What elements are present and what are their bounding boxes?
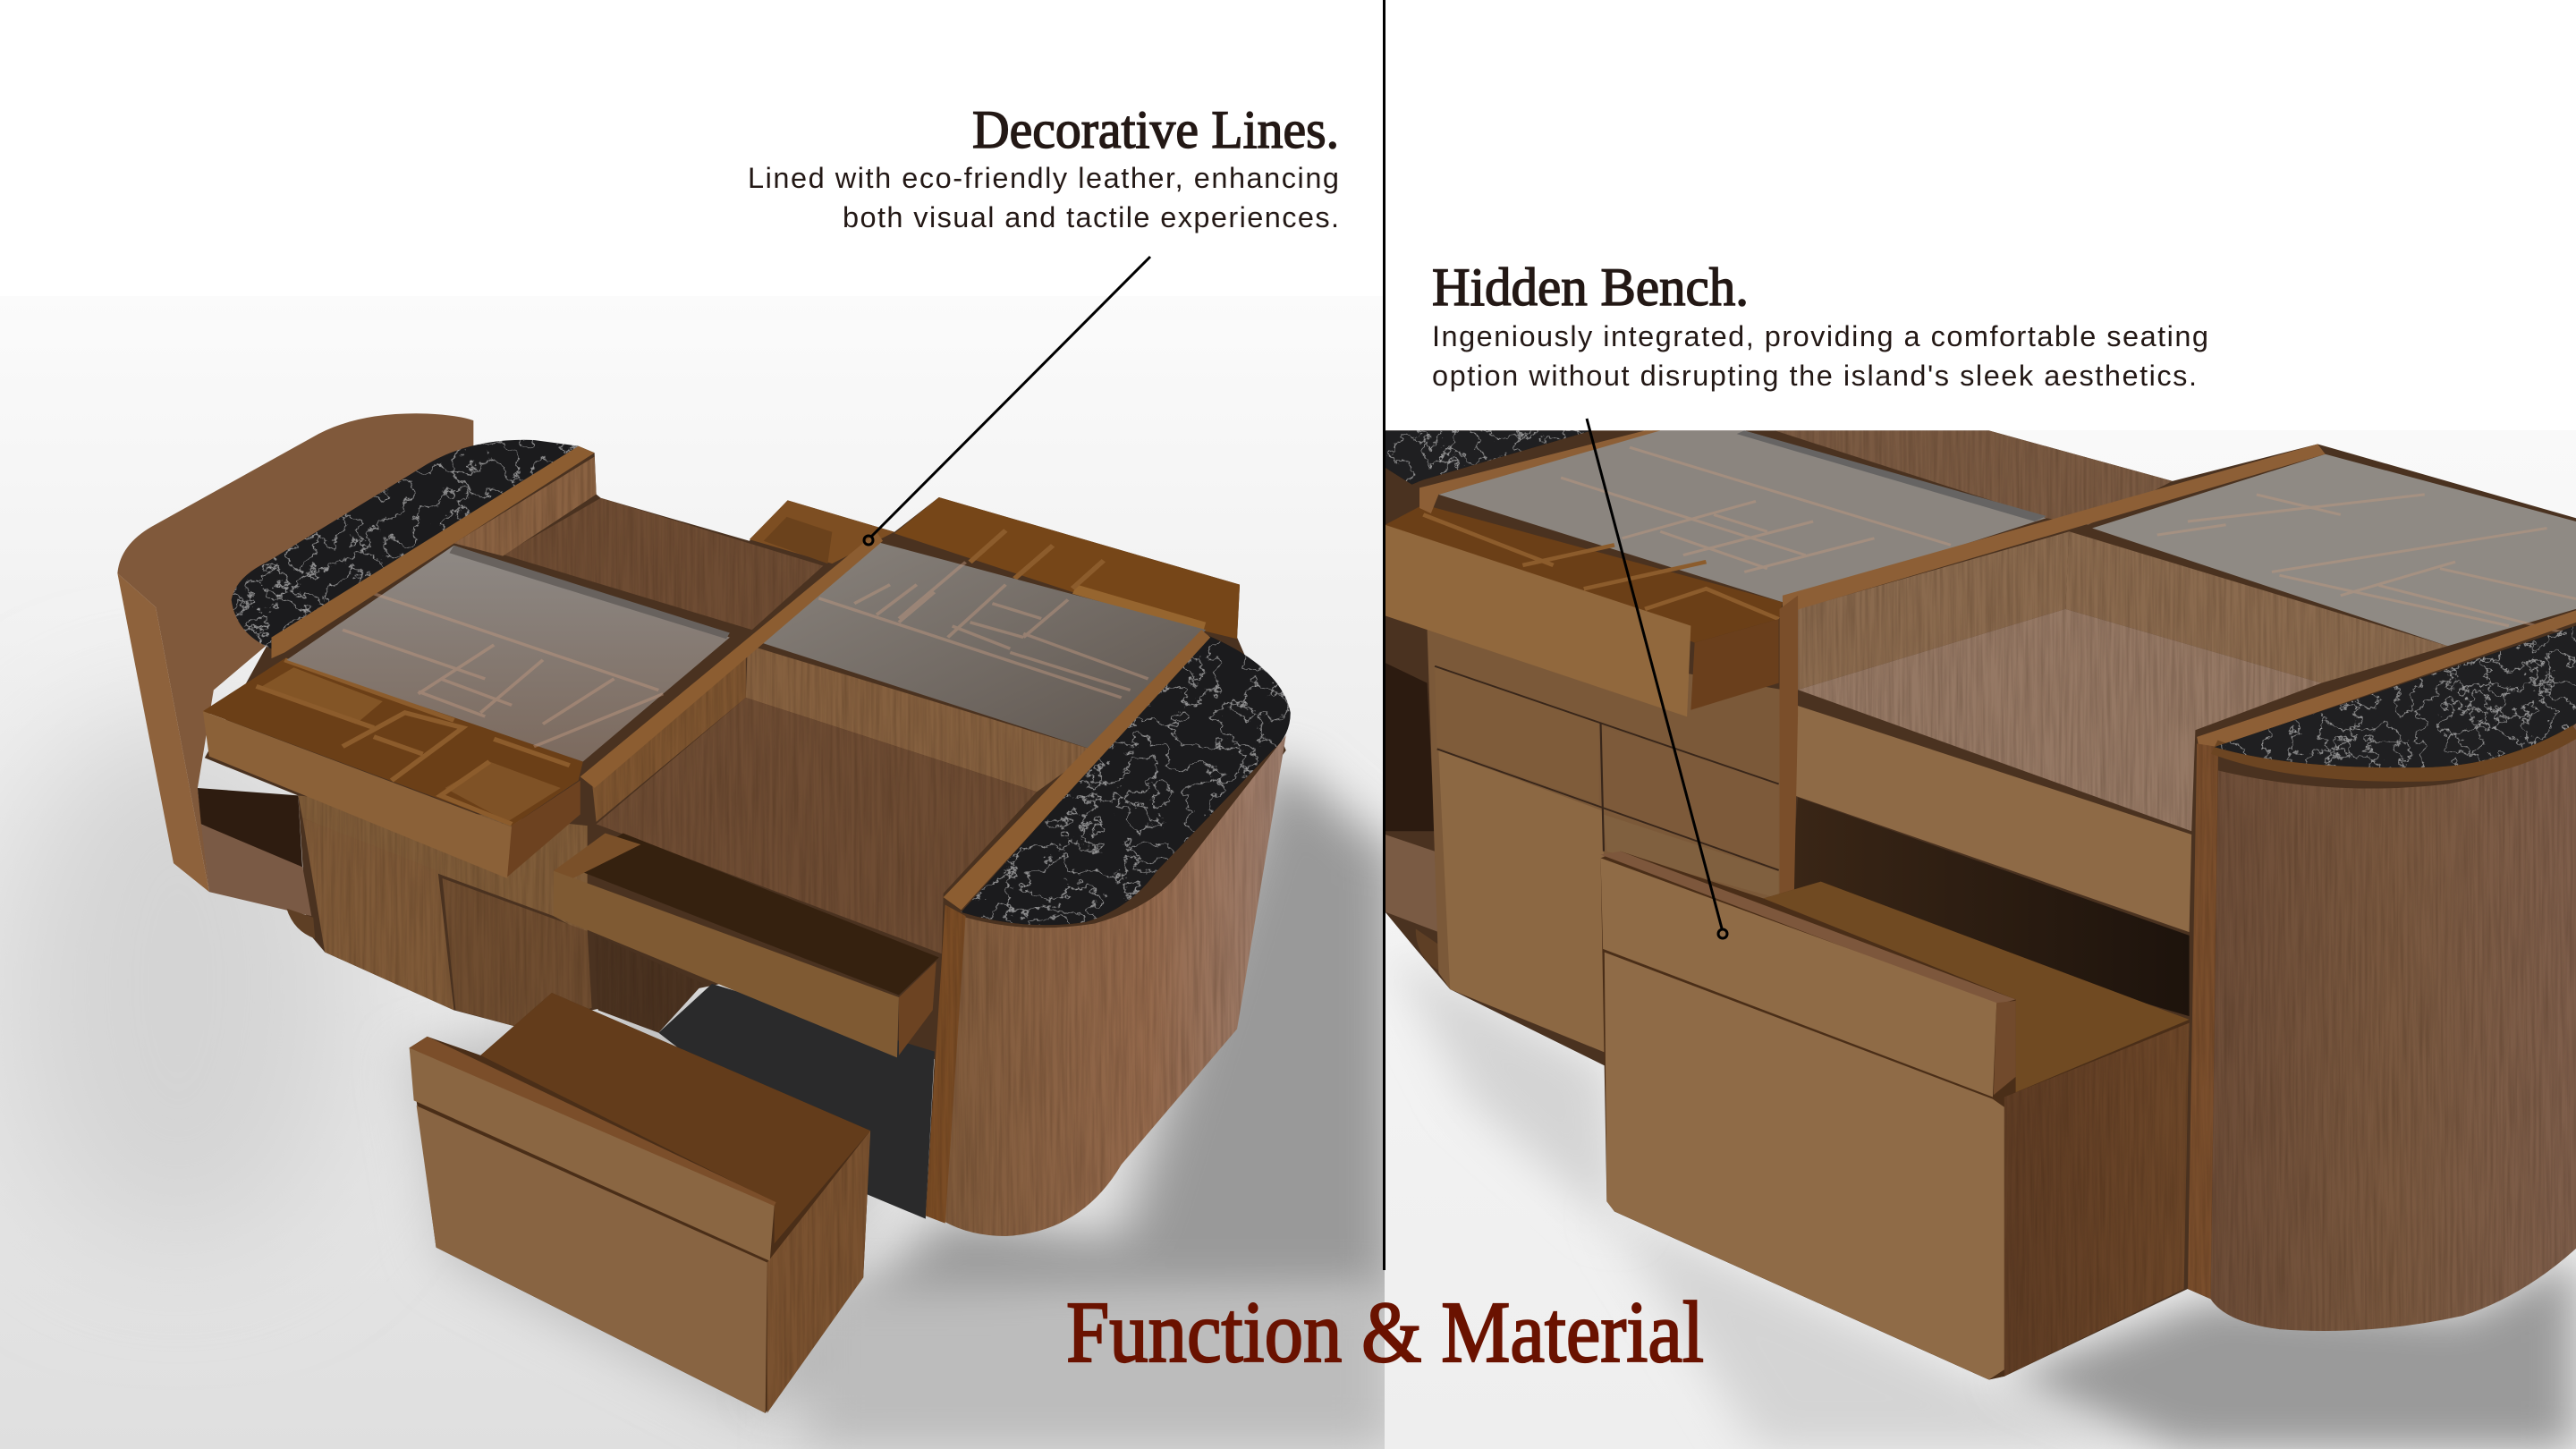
front right drawer [554, 834, 939, 1057]
furniture backing silhouette [1385, 430, 2576, 1380]
description: Ingeniously integrated, providing a comfortable seating [1432, 320, 2208, 352]
description: option without disrupting the island's sleek aesthetics. [1432, 360, 2197, 392]
far floor [1775, 430, 2173, 525]
title: Function & Material [1066, 1284, 1704, 1381]
back wood wall [453, 456, 597, 556]
back curved panel [117, 413, 473, 938]
furniture backing silhouette [205, 446, 1286, 1221]
wooden rails [1419, 430, 2576, 898]
floor shadows right [1393, 953, 2576, 1449]
description [1432, 320, 2208, 392]
glass lids [1438, 430, 2576, 646]
right panel: bench view [1385, 430, 2576, 1449]
pulled drawer [1385, 504, 1783, 716]
description [748, 162, 1339, 233]
pull-out bench [410, 993, 870, 1413]
left drawer pulled out [203, 658, 583, 878]
right marble top [962, 636, 1291, 925]
leader line: decorative lines [864, 257, 1150, 545]
center back floor [503, 498, 823, 630]
description: both visual and tactile experiences. [843, 201, 1339, 233]
back marble top [232, 440, 579, 648]
heading: Decorative Lines. [972, 100, 1339, 159]
back drawers [750, 497, 1240, 639]
left wing cavity [1385, 663, 1443, 972]
floor shadow under table [658, 984, 935, 1219]
marble tops right [1385, 430, 2576, 775]
callout: hidden bench [1432, 258, 2208, 392]
heading: Hidden Bench. [1432, 258, 1749, 317]
floor shadows left [0, 713, 1395, 1449]
right cabinet [2188, 724, 2576, 1331]
callout: decorative lines [748, 100, 1339, 233]
lower cabinet doors [298, 795, 703, 1033]
right glass lid [757, 539, 1206, 750]
lower dark cavity [1790, 798, 2190, 1016]
vertical divider line [1383, 0, 1385, 1270]
drawer front [1790, 703, 2191, 932]
cabinet doors [1428, 629, 1783, 1054]
central well [1798, 531, 2447, 831]
central well [592, 645, 1095, 953]
left glass lid [286, 546, 730, 762]
right cabinet [926, 735, 1286, 1236]
wooden rails [271, 446, 1210, 910]
leader line: hidden bench [1587, 419, 1727, 938]
left panel: open storage view [0, 413, 1385, 1449]
pull-out bench [1601, 852, 2190, 1380]
description: Lined with eco-friendly leather, enhancing [748, 162, 1339, 194]
